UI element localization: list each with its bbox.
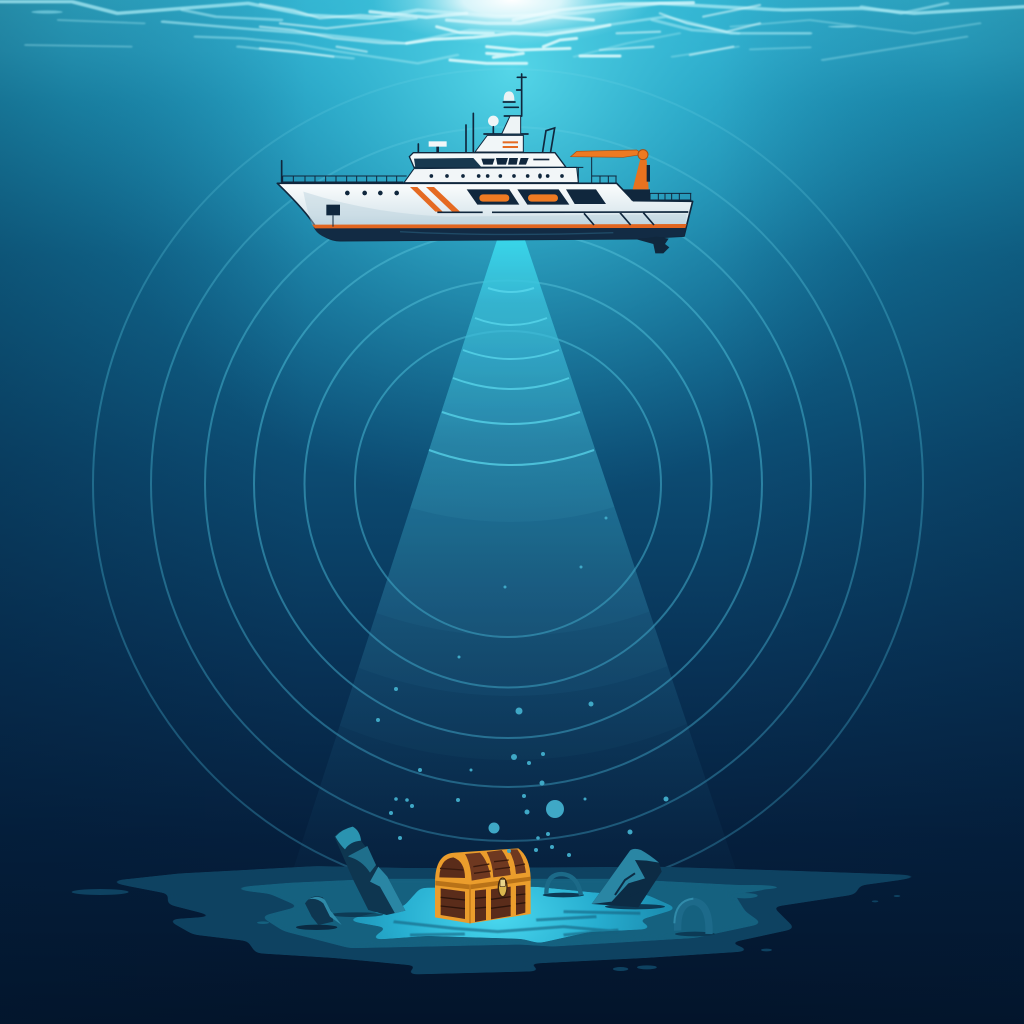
right stone arch <box>674 899 715 936</box>
orange crane <box>571 150 650 201</box>
hull <box>277 183 693 241</box>
research ship <box>277 74 693 253</box>
mast and radar domes <box>282 74 555 183</box>
seabed middle layer <box>229 879 783 948</box>
central caustic web <box>260 3 760 63</box>
stone arch centre <box>543 874 584 897</box>
seabed <box>72 867 926 974</box>
small left rock <box>296 896 342 930</box>
deck railings <box>283 157 691 201</box>
portholes upper deck <box>429 173 564 179</box>
upper superstructure <box>404 116 583 183</box>
treasure chest <box>435 848 531 923</box>
sunlight glare <box>372 0 652 46</box>
rising bubbles <box>376 516 668 857</box>
outer caustic web <box>0 2 1024 63</box>
sonar beam <box>318 240 711 798</box>
pool ripples <box>394 912 640 935</box>
propeller <box>637 237 669 253</box>
small seabed patches <box>72 885 900 971</box>
right leaning rock <box>592 849 665 909</box>
left broken pillar <box>330 827 405 917</box>
seabed lit pool <box>347 887 676 943</box>
sonar concentric rings <box>93 69 923 899</box>
seabed outer layer <box>108 867 926 974</box>
hull details <box>326 187 688 227</box>
beam pulse arcs <box>429 288 594 465</box>
water surface caustics <box>0 2 1024 63</box>
